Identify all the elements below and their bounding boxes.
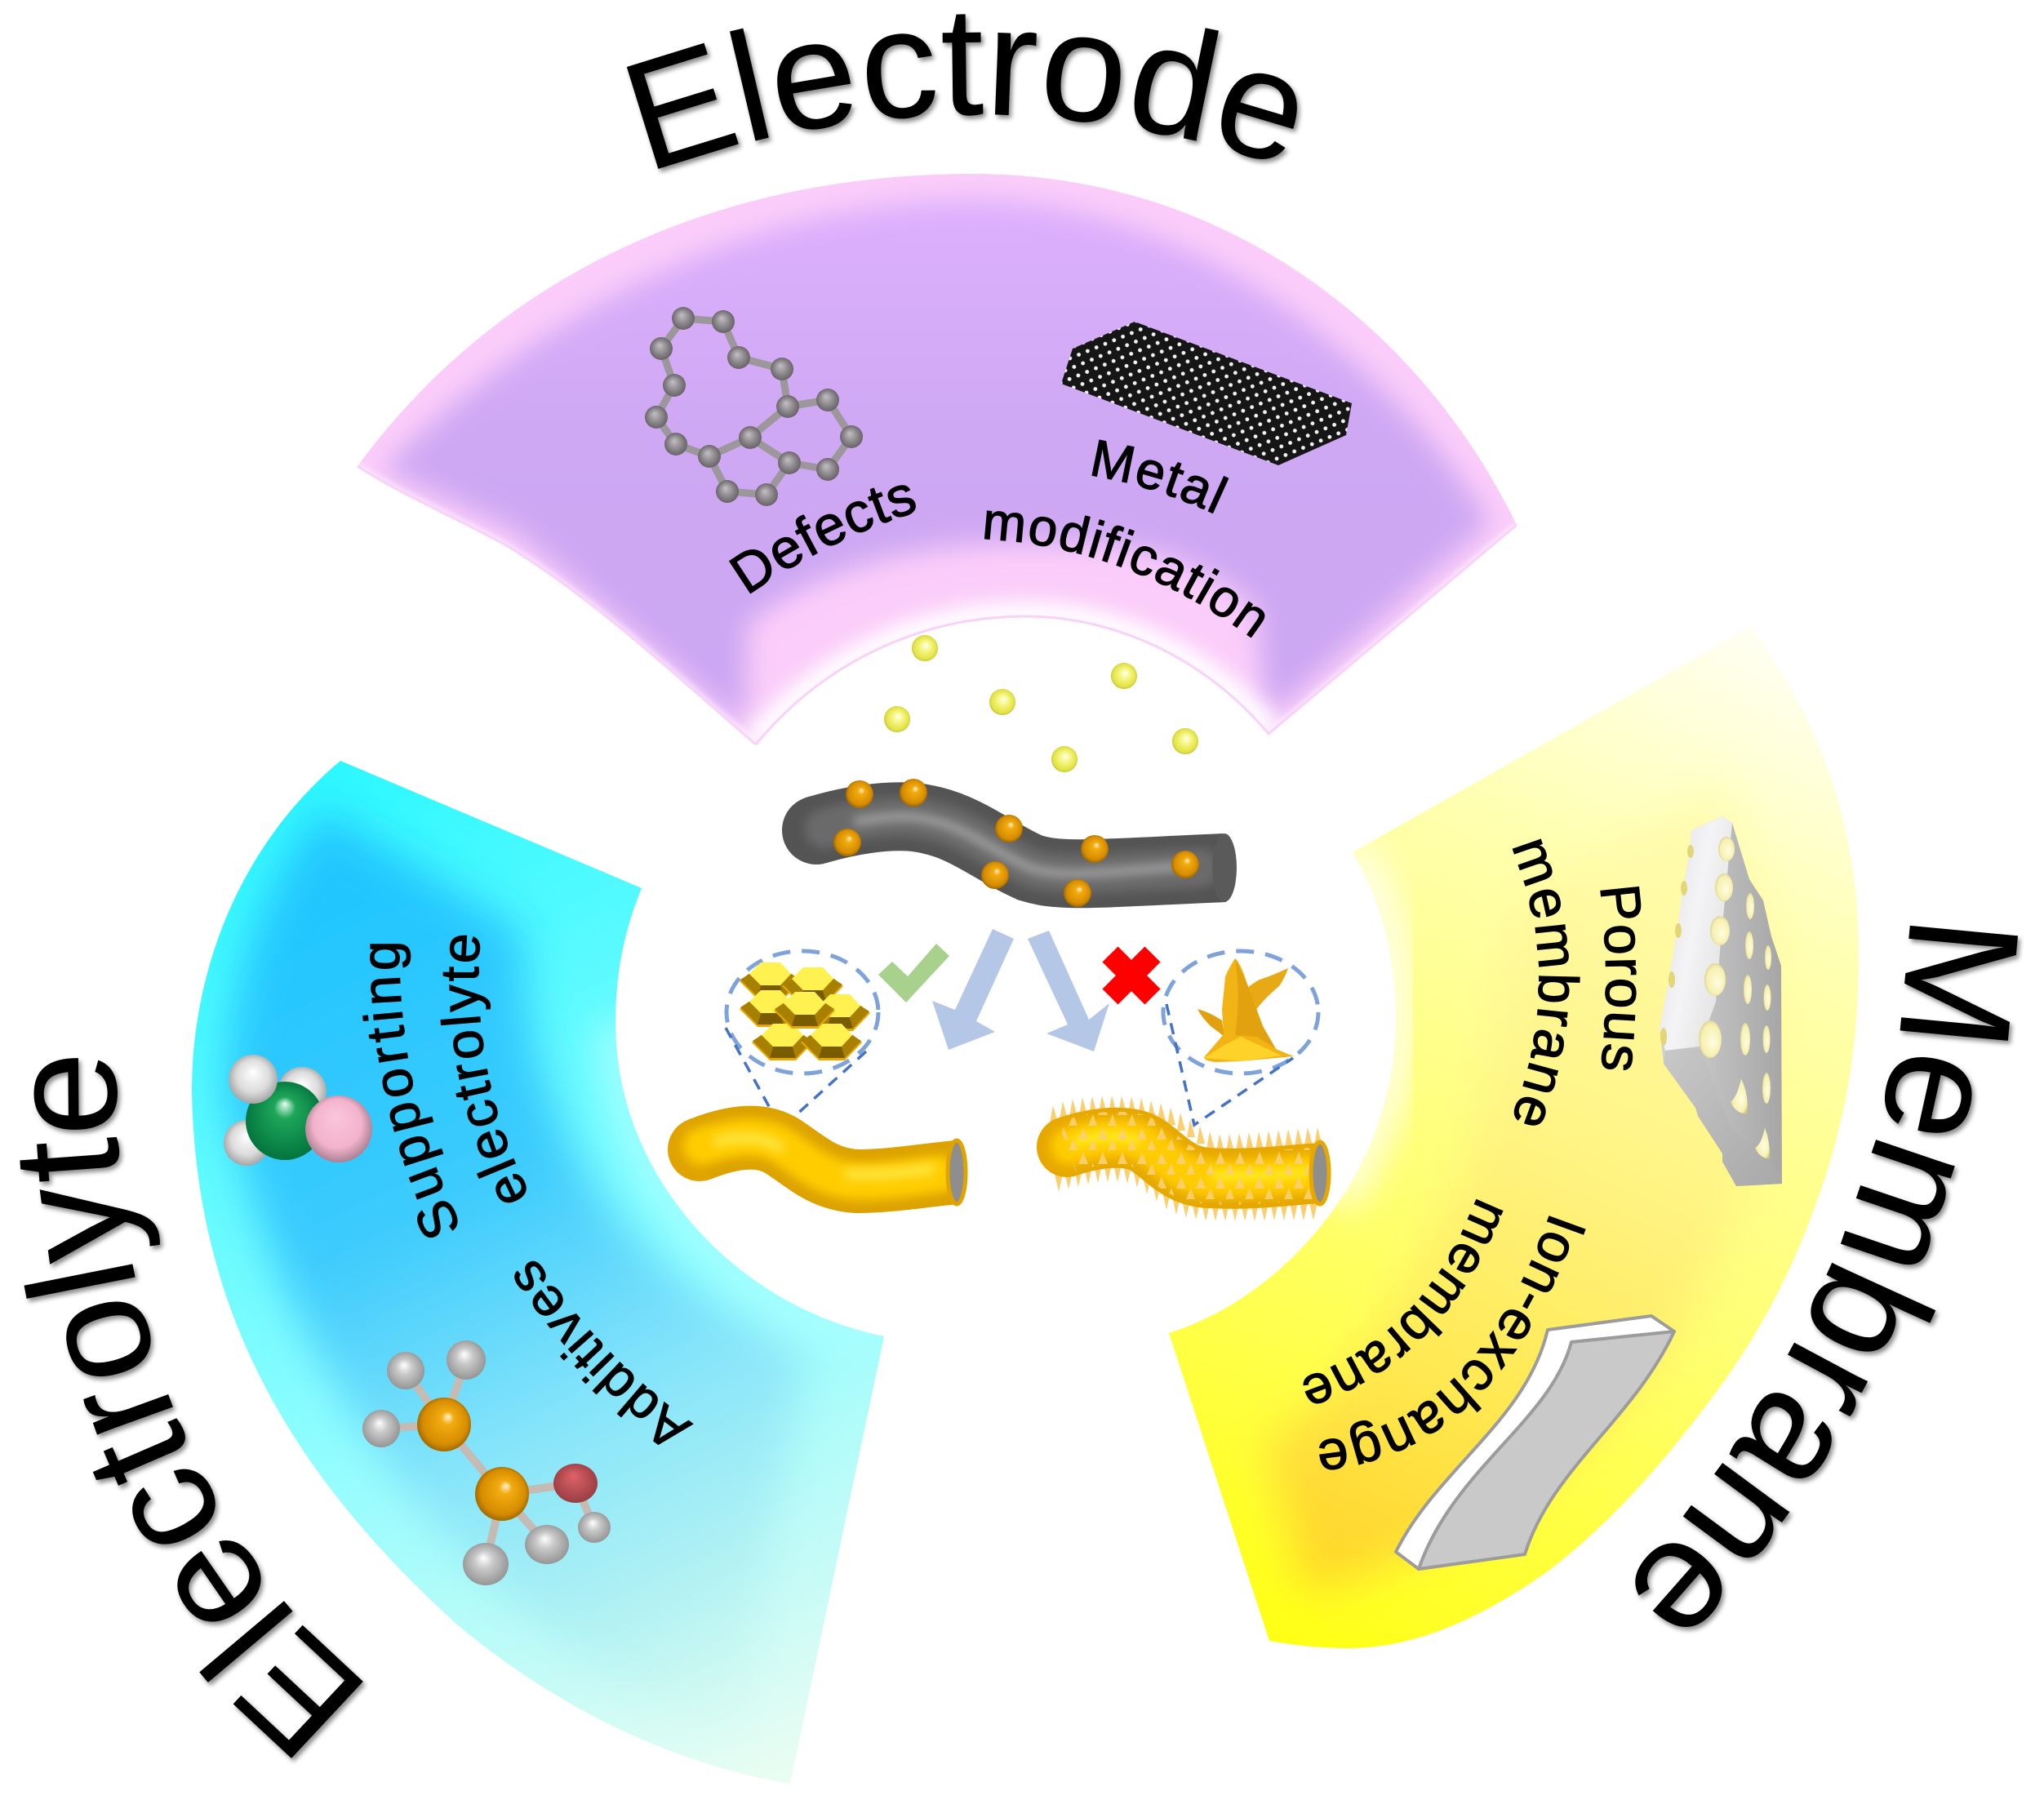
arrow: left, to uniform deposit bbox=[932, 929, 1014, 1050]
panel background: yellow fan bbox=[1169, 626, 1859, 1648]
panel: electrolyte bbox=[192, 761, 884, 1784]
panel background: cyan fan bbox=[192, 761, 884, 1784]
central illustration: deposition on carbon tube bbox=[668, 635, 1329, 1221]
panel: membrane bbox=[1169, 627, 1859, 1648]
orange nuclei on tube bbox=[833, 779, 1199, 907]
callout: dendrite spike bbox=[1163, 951, 1318, 1125]
yellow metal ions bbox=[884, 635, 1198, 772]
label: membrane (porous): membrane bbox=[1512, 838, 1580, 1126]
callout: hexagonal plates bbox=[726, 951, 878, 1115]
panel background: purple fan bbox=[358, 174, 1517, 744]
label: Supporting: Supporting bbox=[362, 944, 458, 1238]
arrow: right, to dendrite deposit bbox=[1028, 931, 1109, 1051]
label: modification: modification bbox=[984, 510, 1265, 638]
label: Defects: Defects bbox=[728, 485, 916, 594]
icon: defect carbon ring molecule bbox=[645, 307, 863, 506]
spiky gold tube bbox=[1037, 1096, 1329, 1221]
icon: green check bbox=[878, 944, 949, 1002]
icon: metal modified block bbox=[1061, 322, 1352, 465]
label: membrane (ion-exchange): membrane bbox=[1303, 1198, 1504, 1404]
label: electrolyte: electrolyte bbox=[440, 936, 527, 1203]
icon: ion-exchange membrane sheet bbox=[1396, 1316, 1674, 1569]
icon: porous membrane block bbox=[1660, 816, 1782, 1186]
gray carbon tube bbox=[782, 796, 1237, 902]
title: Membrane: Membrane bbox=[1634, 926, 2023, 1633]
label: Additives: Additives bbox=[514, 1260, 694, 1445]
label: Ion-exchange: Ion-exchange bbox=[1319, 1216, 1586, 1470]
icon: supporting electrolyte molecule bbox=[224, 1055, 372, 1166]
icon: red cross bbox=[1110, 954, 1153, 997]
panel: electrode bbox=[357, 174, 1517, 745]
label: Metal: Metal bbox=[1091, 439, 1229, 514]
icon: additive molecule bbox=[362, 1340, 611, 1585]
smooth gold tube bbox=[668, 1118, 966, 1204]
label: Porous: Porous bbox=[1600, 887, 1641, 1071]
